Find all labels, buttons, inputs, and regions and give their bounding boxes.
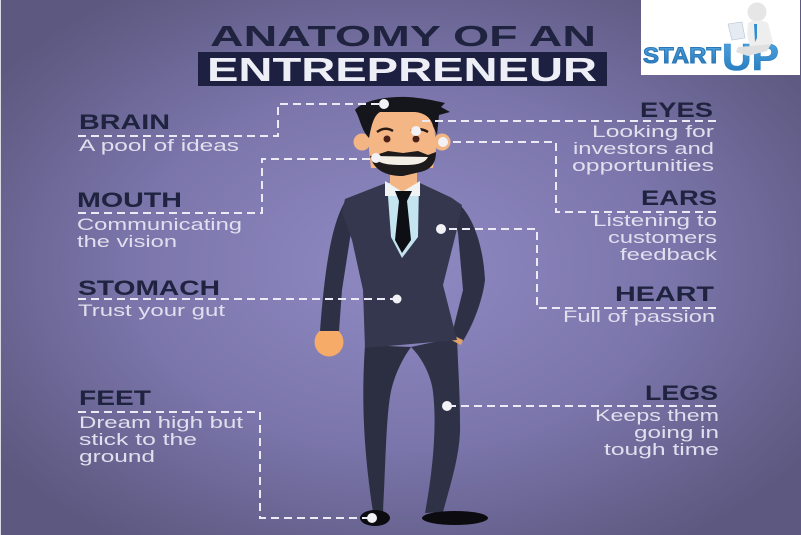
beard [370,151,436,176]
title line: anatomy of an: ANATOMY OF AN [210,21,596,53]
label: legs: Keeps them [595,406,719,425]
label: mouth [77,189,242,251]
face [369,108,436,168]
left leg [363,345,411,512]
label: eyes: Looking for [592,122,714,141]
label: ears [593,187,718,264]
label: stomach: STOMACH [78,277,220,300]
neck [390,170,417,192]
startup wordmark [643,37,779,79]
label: stomach: Trust your gut [78,301,225,320]
title banner [198,52,607,86]
startup wordmark: START [643,43,722,68]
mouth [373,156,428,165]
hair [355,97,450,138]
right shoe [422,511,488,525]
label: ears: feedback [620,245,718,264]
label: mouth: the vision [77,232,177,251]
label: feet: Dream high but [79,413,243,432]
label: legs: tough time [604,440,719,459]
label: heart: HEART [615,283,714,306]
left arm [320,200,351,331]
label: heart: Full of passion [563,307,715,326]
title line: entrepreneur: ENTREPRENEUR [207,51,597,88]
jacket [342,183,462,348]
label: feet: ground [79,447,155,466]
right leg [411,337,460,513]
label: eyes: investors and [573,139,714,158]
label: feet [79,387,243,466]
label: eyes: EYES [640,99,713,122]
label: brain: A pool of ideas [79,136,239,155]
label: brain: BRAIN [79,111,170,134]
left shoe [360,510,390,526]
label: ears: Listening to [593,211,717,230]
eyebrows [377,129,428,132]
label: feet: FEET [79,387,151,410]
tie [395,191,412,253]
startup logo [641,0,800,79]
label: eyes [572,99,714,175]
collar [385,181,420,196]
shirt [387,183,419,258]
left edge stripe [0,0,1,535]
eyes [384,136,390,142]
label: legs [595,382,719,459]
label: stomach [78,277,225,320]
label: feet: stick to the [79,430,197,449]
label: heart [563,283,715,326]
label: eyes: opportunities [572,156,714,175]
right arm [450,197,485,341]
icon: 3d person with laptop [728,2,773,56]
figure: entrepreneur [314,97,488,526]
label: ears: customers [608,228,717,247]
label: legs: LEGS [645,382,718,405]
label: legs: going in [634,423,719,442]
logo background [641,0,800,75]
connector lines [78,99,716,523]
ears [354,134,370,150]
label: brain [79,111,239,155]
left hand [314,328,344,356]
right hand [449,334,463,345]
startup wordmark: UP [722,37,779,79]
label: mouth: Communicating [77,215,242,234]
label: ears: EARS [641,187,717,210]
label: mouth: MOUTH [77,189,182,212]
title [198,21,607,88]
